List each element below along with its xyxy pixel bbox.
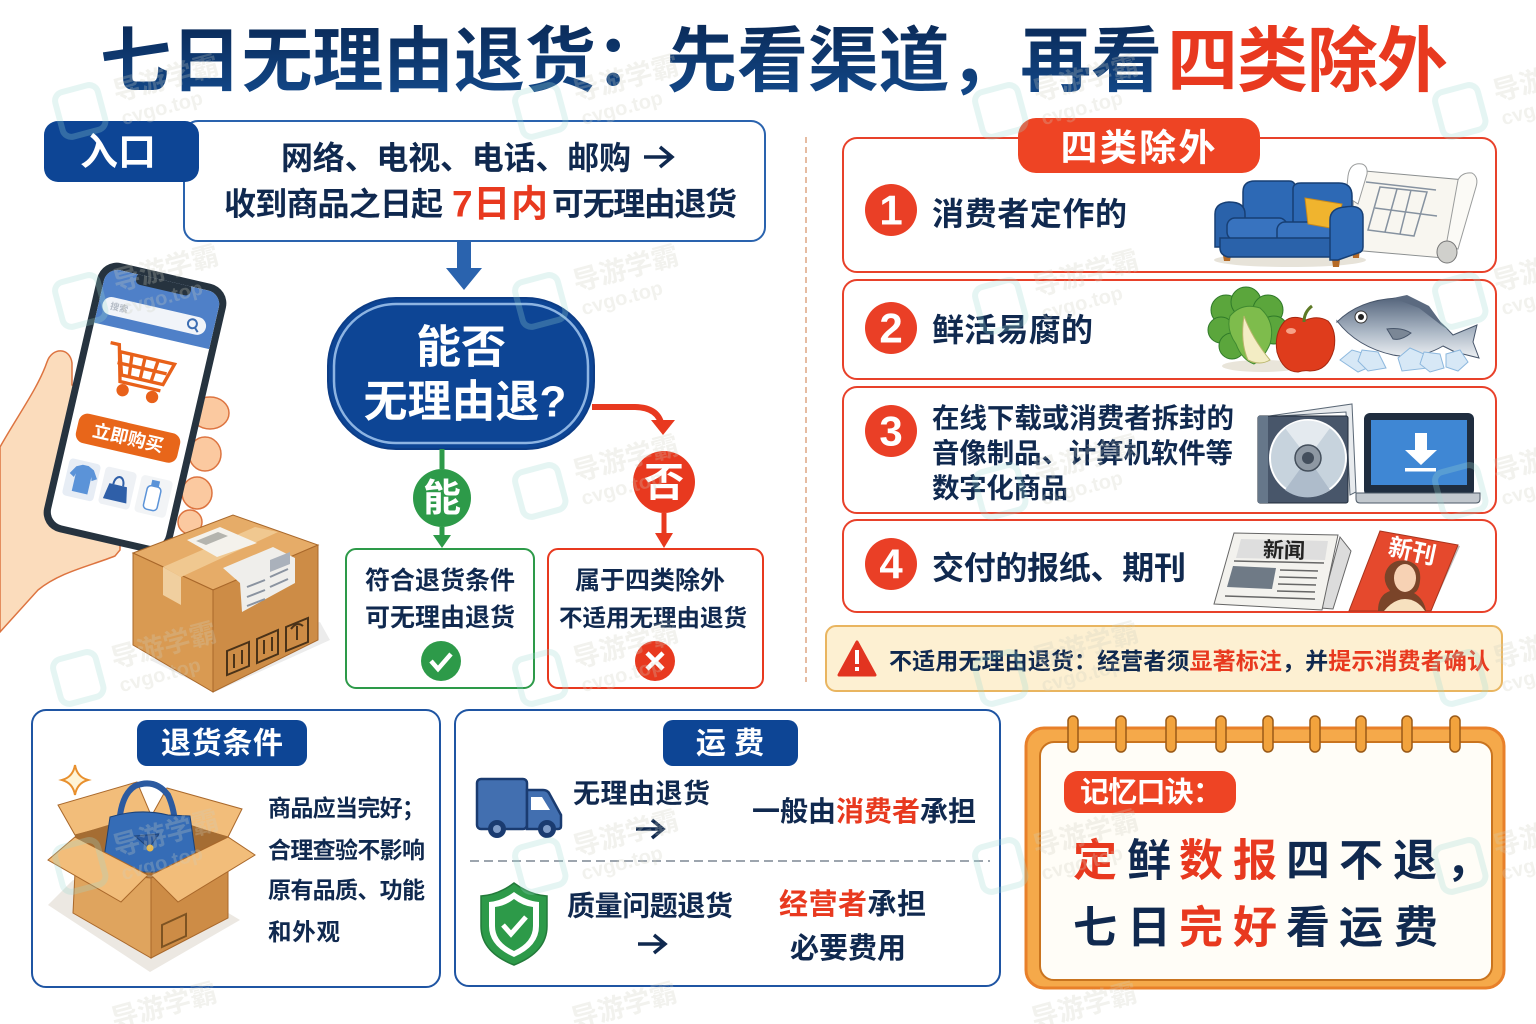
panel: exclusion 1 (843, 138, 1496, 272)
illustration: magazine (1349, 531, 1460, 611)
entry text line 2 (224, 184, 737, 224)
text: 导游学霸 (110, 805, 222, 862)
tag: shipping: 运 费 (696, 728, 764, 760)
text: perishable: 鲜活易腐的 (932, 312, 1093, 348)
text: consumer pays: 一般由消费者承担 (752, 796, 976, 826)
text: digital goods: 在线下载或消费者拆封的 (932, 402, 1234, 434)
branch: no: 否 (644, 461, 684, 505)
warning text: 不适用无理由退货：经营者须显著标注，并提示消费者确认 (889, 648, 1490, 674)
icon: shopping cart (100, 343, 176, 405)
text: cvgo.top (579, 654, 665, 697)
illustration: parcel box (133, 515, 330, 692)
panel: exclusion 2 (843, 280, 1496, 379)
icon: check (421, 641, 461, 681)
text: cvgo.top (119, 277, 205, 320)
result: cannot return: 不适用无理由退货 (559, 605, 747, 631)
illustration: laptop download (1356, 413, 1480, 503)
entry tag (44, 121, 199, 182)
text: operator pays: 必要费用 (790, 932, 906, 965)
illustration: magazine: 新刊 (1386, 534, 1438, 570)
mnemonic line 2: 好 (1233, 904, 1277, 952)
mnemonic line 2: 完 (1179, 904, 1223, 952)
warning bar (826, 626, 1502, 691)
buy button: 立即购买 (91, 419, 166, 456)
icon: truck (477, 779, 561, 838)
tag: mnemonic: 记忆口诀： (1080, 776, 1222, 809)
result: can return: 符合退货条件 (365, 567, 515, 595)
illustration: newspaper: 新闻 (1263, 538, 1305, 563)
illustration: open box with handbag (48, 782, 255, 972)
panel: return conditions (32, 710, 440, 987)
branch: no (592, 407, 695, 548)
panel: exclusion 3 (843, 387, 1496, 513)
entry text line 2: 7日内 (452, 184, 548, 224)
entry text line 1: 网络、电视、电话、邮购 (281, 140, 631, 176)
mnemonic line 1: 定 (1073, 836, 1117, 886)
mnemonic line 1: 不 (1339, 836, 1383, 886)
text: cvgo.top (119, 87, 205, 130)
panel: entry channel (44, 121, 765, 241)
decision node (328, 298, 594, 449)
text: cvgo.top (1039, 467, 1125, 510)
section tag: four exclusions: 四类除外 (1060, 128, 1216, 168)
mnemonic line 2: 看 (1286, 904, 1330, 952)
panel: shipping cost (455, 710, 1000, 986)
tag: shipping (663, 720, 798, 766)
mnemonic line 2: 七 (1073, 904, 1117, 952)
illustration: apple (1276, 306, 1335, 372)
divider (805, 137, 807, 682)
product thumbnails (62, 458, 173, 519)
branch: yes (413, 449, 471, 548)
mnemonic line 1 (1073, 836, 1490, 886)
illustration: hand holding phone (0, 259, 230, 632)
mnemonic line 1: 四 (1286, 836, 1330, 886)
text: 导游学霸 (110, 240, 222, 297)
number 2 (865, 302, 917, 354)
text: 导游学霸 (570, 50, 682, 107)
icon: cross (635, 641, 675, 681)
text: 导游学霸 (110, 50, 222, 107)
hand (0, 351, 229, 632)
illustration: blue sofa (1214, 181, 1366, 267)
result: cannot return (548, 549, 763, 688)
text: conditions: 合理查验不影响 (268, 837, 425, 863)
text: digital goods (932, 402, 1234, 504)
text: cvgo.top (119, 842, 205, 885)
text: 导游学霸 (570, 805, 682, 862)
mnemonic line 1: 退 (1393, 836, 1437, 886)
text: cvgo.top (1039, 842, 1125, 885)
buy button (74, 412, 182, 465)
panel: exclusion 4 (843, 520, 1496, 612)
number 2: 2 (879, 304, 903, 352)
text: cvgo.top (579, 277, 665, 320)
text: newspapers: 交付的报纸、期刊 (932, 550, 1186, 586)
mnemonic line 1: 数 (1179, 836, 1223, 886)
mnemonic line 2: 日 (1127, 904, 1171, 952)
icon: sparkle (62, 765, 88, 795)
text: operator pays (779, 888, 926, 965)
number 3: 3 (879, 408, 903, 454)
illustration: CD case (1258, 404, 1356, 503)
text: 导游学霸 (1030, 430, 1142, 487)
text: 导游学霸 (1030, 617, 1142, 674)
text: cvgo.top (1039, 87, 1125, 130)
result: can return: 可无理由退货 (365, 604, 515, 632)
text: 导游学霸 (570, 617, 682, 674)
text: cvgo.top (579, 842, 665, 885)
illustration: lettuce (1208, 287, 1302, 372)
text: 导游学霸 (1030, 245, 1142, 302)
text: 导游学霸 (570, 240, 682, 297)
text: conditions: 原有品质、功能 (268, 877, 425, 903)
number 4 (865, 538, 917, 590)
text: no-reason return (573, 779, 710, 838)
entry tag: 入口 (80, 132, 156, 174)
number 1 (865, 184, 917, 236)
text: operator pays: 经营者承担 (779, 888, 926, 921)
result: can return (346, 549, 534, 688)
panel: memory mnemonic calendar (1026, 716, 1504, 988)
text: quality return: 质量问题退货 (567, 890, 733, 922)
decision node: 能否 (416, 322, 506, 372)
number 1: 1 (879, 186, 903, 234)
text: custom made: 消费者定作的 (932, 196, 1127, 232)
entry text line 2: 收到商品之日起 (224, 186, 443, 222)
handling marks (227, 618, 308, 675)
section tag: four exclusions (1018, 118, 1260, 173)
arrow: entry to decision (446, 241, 482, 290)
text: 导游学霸 (570, 430, 682, 487)
mnemonic line 2 (1073, 904, 1438, 952)
illustration: blueprint (1346, 164, 1477, 263)
illustration: fish (1337, 295, 1479, 358)
text: cvgo.top (579, 87, 665, 130)
text: digital goods: 音像制品、计算机软件等 (932, 438, 1233, 468)
text: 导游学霸 (1030, 805, 1142, 862)
text: cvgo.top (1039, 282, 1125, 325)
text: quality return (567, 890, 733, 953)
title: 四类除外 (1167, 22, 1448, 102)
decision node: 无理由退? (364, 378, 566, 426)
text: conditions: 商品应当完好； (268, 795, 425, 821)
phone (40, 259, 230, 557)
text: conditions (268, 795, 425, 945)
mnemonic line 2: 运 (1339, 904, 1383, 952)
mnemonic line 1: ， (1446, 836, 1490, 886)
text: 导游学霸 (1030, 50, 1142, 107)
entry text line 2: 可无理由退货 (552, 186, 737, 222)
illustration: newspaper (1214, 533, 1351, 610)
tag: mnemonic (1064, 771, 1236, 813)
number 3 (865, 405, 917, 457)
search bar (101, 295, 208, 337)
mnemonic line 1: 鲜 (1127, 836, 1171, 886)
icon: shield (481, 883, 547, 965)
number 4: 4 (879, 540, 903, 588)
text: conditions: 和外观 (268, 919, 340, 945)
text: cvgo.top (579, 467, 665, 510)
icon: warning (839, 642, 875, 675)
tag: return conditions (137, 720, 307, 766)
mnemonic line 1: 报 (1233, 836, 1277, 886)
tag: return conditions: 退货条件 (161, 728, 283, 760)
search bar: 搜索 (109, 300, 129, 315)
text: no-reason return: 无理由退货 (573, 779, 710, 809)
calendar rings (1068, 716, 1460, 752)
title: 七日无理由退货：先看渠道，再看 (100, 22, 1162, 102)
illustration: ice (1340, 348, 1468, 372)
text: digital goods: 数字化商品 (932, 472, 1068, 504)
mnemonic line 2: 费 (1394, 904, 1438, 952)
text: cvgo.top (117, 654, 203, 697)
branch: yes: 能 (423, 478, 461, 520)
text: cvgo.top (1039, 654, 1125, 697)
result: cannot return: 属于四类除外 (575, 566, 725, 595)
text: 导游学霸 (108, 617, 220, 674)
